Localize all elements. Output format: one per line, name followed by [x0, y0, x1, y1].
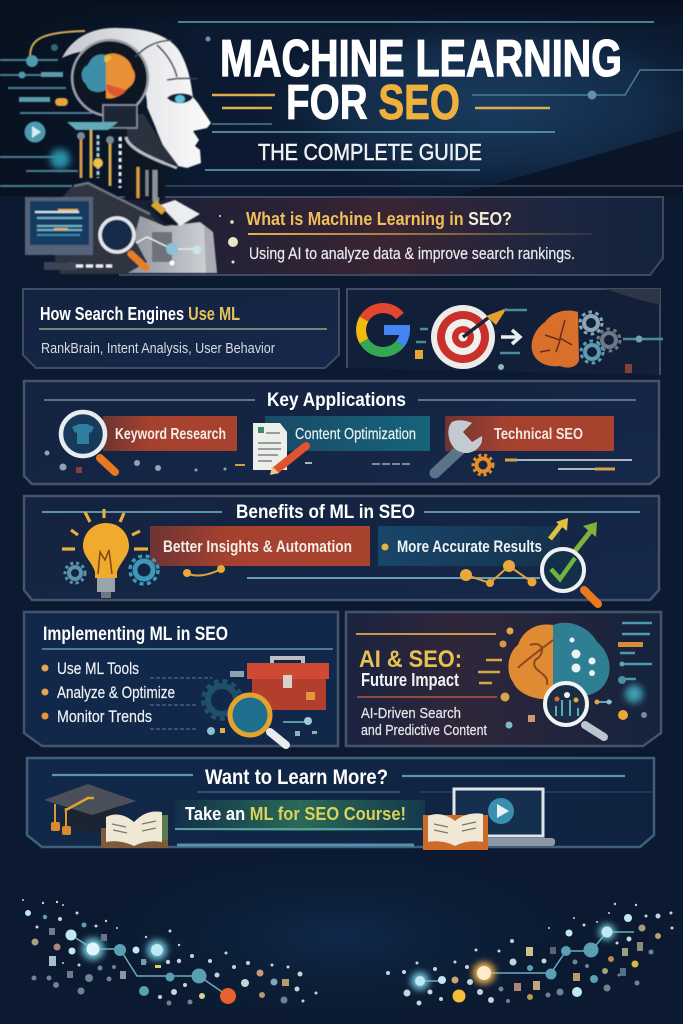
ai and seo heading: AI & SEO:: [359, 646, 462, 673]
magnifier: [100, 218, 146, 268]
title decorative lines: [165, 22, 683, 186]
details: [478, 623, 652, 728]
jaw plate: [127, 113, 178, 165]
icon: arrow: [501, 330, 520, 344]
bullet list: Use ML Tools: [57, 660, 139, 678]
icon: toolbox: [230, 658, 329, 710]
subtitle: THE COMPLETE GUIDE: [258, 139, 482, 165]
icon: magnifier check: [542, 549, 598, 604]
title block: [165, 22, 683, 186]
icon: magnifier: [545, 683, 604, 737]
icon: gear: [203, 681, 241, 719]
connector details: [415, 310, 663, 373]
brain cavity: [72, 40, 148, 116]
helmet seams: [135, 40, 197, 80]
heading lines: [356, 633, 496, 635]
future impact: Future Impact: [361, 670, 459, 690]
eye: [167, 93, 193, 103]
left circuit lines: [0, 31, 92, 186]
icon: magnifier: [61, 412, 115, 472]
heading: How Search Engines Use ML: [40, 304, 240, 324]
monitor: [25, 197, 93, 270]
icon: gear: [473, 455, 493, 475]
progress line: [247, 577, 540, 579]
icon: robot head and body: [0, 28, 217, 274]
subtext: RankBrain, Intent Analysis, User Behavior: [41, 340, 275, 357]
technical seo: Technical SEO: [494, 426, 583, 443]
network dots: bottom left: [22, 899, 318, 1006]
icon: wrench: [435, 420, 482, 473]
arrows up: [550, 518, 597, 551]
icon: target: [431, 305, 507, 369]
heading: Key Applications: [267, 389, 406, 411]
panel: google target brain: [347, 289, 663, 375]
title: for seo: FOR SEO: [286, 76, 460, 130]
icon: light bulb: [62, 509, 148, 598]
dashes: [76, 264, 112, 268]
network dots: bottom right: [386, 903, 674, 1006]
silver torso: [128, 216, 217, 273]
icon: google g: [361, 308, 405, 352]
panel: how search engines use ml: [23, 289, 339, 368]
icon: gears: [580, 312, 620, 363]
icon: document and pen: [253, 423, 306, 475]
icon: graduation cap: [44, 784, 136, 835]
content optimization: Content Optimization: [295, 426, 416, 443]
heading: Implementing ML in SEO: [43, 624, 228, 645]
scattered dots: [44, 450, 412, 473]
nodes: [136, 237, 202, 266]
panel: key applications: [24, 381, 659, 484]
heading: What is Machine Learning in SEO?: [246, 209, 512, 229]
benefit: better insights: Better Insights & Automation: [163, 537, 352, 556]
call to action bar: [175, 800, 425, 831]
neck and wires: [77, 130, 165, 200]
icon: split brain: [508, 623, 610, 699]
brain icon: [82, 53, 135, 99]
keyword research: Keyword Research: [115, 426, 226, 443]
description: AI-Driven Search: [361, 705, 461, 722]
icon: orange brain: [532, 310, 579, 368]
helmet and face: [62, 28, 211, 168]
panel: want to learn more: [27, 758, 654, 850]
panel: what is machine learning: [120, 197, 663, 275]
heading: Benefits of ML in SEO: [236, 501, 415, 523]
panel: benefits of ml in seo: [24, 496, 659, 604]
description: Using AI to analyze data & improve search rankings.: [249, 245, 575, 263]
bullet list: Monitor Trends: [57, 708, 152, 726]
benefit: more accurate: [378, 526, 560, 566]
glow dot: [50, 149, 70, 169]
bullet list: [42, 660, 212, 729]
call to action bar: Take an ML for SEO Course!: [185, 804, 406, 824]
funnel: [67, 122, 118, 130]
benefit: more accurate: More Accurate Results: [397, 537, 542, 556]
icon: open book left: [101, 811, 168, 848]
technical seo: [435, 416, 632, 475]
heading: Want to Learn More?: [205, 766, 388, 789]
line chart: [183, 560, 536, 587]
icon: gears: [65, 556, 158, 584]
keyword research: [61, 412, 237, 472]
what-is dots: [219, 215, 238, 264]
description line two: and Predictive Content: [361, 722, 488, 739]
icon: magnifier: [230, 695, 286, 745]
icon: open book right: [423, 813, 488, 850]
small screen: [103, 105, 137, 128]
benefit: better insights: [150, 526, 370, 566]
detail dots: [207, 717, 317, 736]
icon: laptop with play: [454, 789, 555, 846]
play icon: [24, 122, 46, 142]
panel: ai and seo future impact: [346, 612, 661, 746]
bullet list: Analyze & Optimize: [57, 684, 175, 702]
panel: implementing ml in seo: [24, 612, 338, 746]
content optimization: [253, 416, 430, 475]
shoulder armor: [60, 182, 172, 274]
